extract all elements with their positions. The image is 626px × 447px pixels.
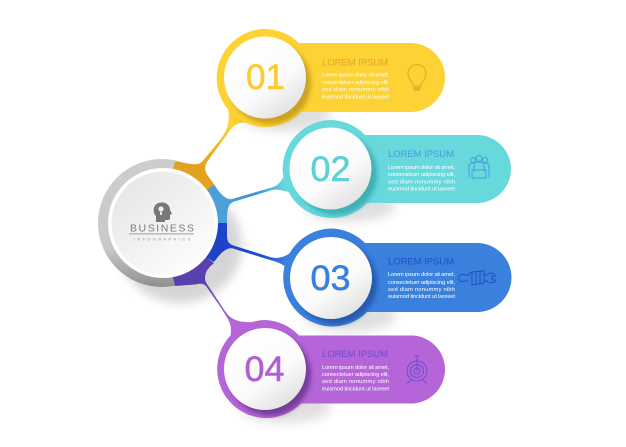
- body text: sed diam nonummy nibh: [322, 379, 389, 385]
- body text: Lorem ipsum dolor sit amet,: [388, 272, 455, 278]
- body text: euismod tincidunt ut laoreet: [322, 386, 389, 392]
- title: LOREM IPSUM: [322, 58, 388, 68]
- pill shape: [217, 320, 445, 418]
- body text: euismod tincidunt ut laoreet: [388, 186, 455, 192]
- pill shape: [283, 228, 511, 326]
- body text: Lorem ipsum dolor sit amet,: [322, 72, 389, 78]
- number disc: [290, 128, 377, 215]
- pill shape: [217, 29, 445, 127]
- icon: light bulb: [408, 64, 426, 90]
- body text: consectetuer adipiscing elit,: [388, 172, 455, 178]
- number: 01: [246, 58, 285, 97]
- body text: [388, 165, 455, 192]
- title: LOREM IPSUM: [322, 349, 388, 360]
- body text: [322, 72, 389, 100]
- grey outer ring: [98, 159, 226, 287]
- body text: euismod tincidunt ut laoreet: [322, 94, 389, 100]
- panel: step 01: [217, 29, 445, 131]
- body text: consectetuer adipiscing elit,: [322, 372, 389, 378]
- body text: [388, 272, 455, 300]
- connector: yellow: [160, 108, 250, 223]
- number: 02: [310, 150, 350, 189]
- number disc: [224, 328, 311, 416]
- icon: head with bulb: [154, 202, 172, 222]
- underline: [129, 232, 194, 235]
- body text: sed diam nonummy nibh: [388, 287, 455, 293]
- body text: euismod tincidunt ut laoreet: [388, 294, 455, 300]
- number: 03: [310, 259, 350, 298]
- panel: step 03: [283, 228, 511, 332]
- body text: [322, 365, 389, 392]
- body text: consectetuer adipiscing elit,: [388, 280, 455, 286]
- panel: step 02: [283, 120, 511, 222]
- central hub: [98, 108, 293, 338]
- icon: target: [407, 356, 427, 384]
- pill shape: [283, 120, 511, 218]
- body text: Lorem ipsum dolor sit amet,: [388, 165, 455, 171]
- panel: step 04: [217, 320, 445, 423]
- body text: Lorem ipsum dolor sit amet,: [322, 365, 389, 371]
- body text: sed diam nonummy nibh: [388, 180, 455, 186]
- body text: consectetuer adipiscing elit,: [322, 80, 389, 86]
- number: 04: [244, 350, 284, 389]
- connector: blue: [160, 223, 293, 267]
- title: LOREM IPSUM: [388, 149, 454, 160]
- title: LOREM IPSUM: [388, 256, 454, 268]
- connector: teal: [160, 174, 292, 223]
- number disc: [224, 36, 311, 124]
- icon: team: [469, 156, 489, 178]
- body text: sed diam nonummy nibh: [322, 87, 389, 93]
- icon: wrench: [459, 271, 496, 285]
- centre disc: [108, 168, 218, 278]
- connector: purple: [160, 223, 252, 338]
- number disc: [290, 237, 377, 324]
- heading: business: BUSINESS: [130, 222, 194, 234]
- subheading: infographics: INFOGRAPHICS: [134, 238, 190, 242]
